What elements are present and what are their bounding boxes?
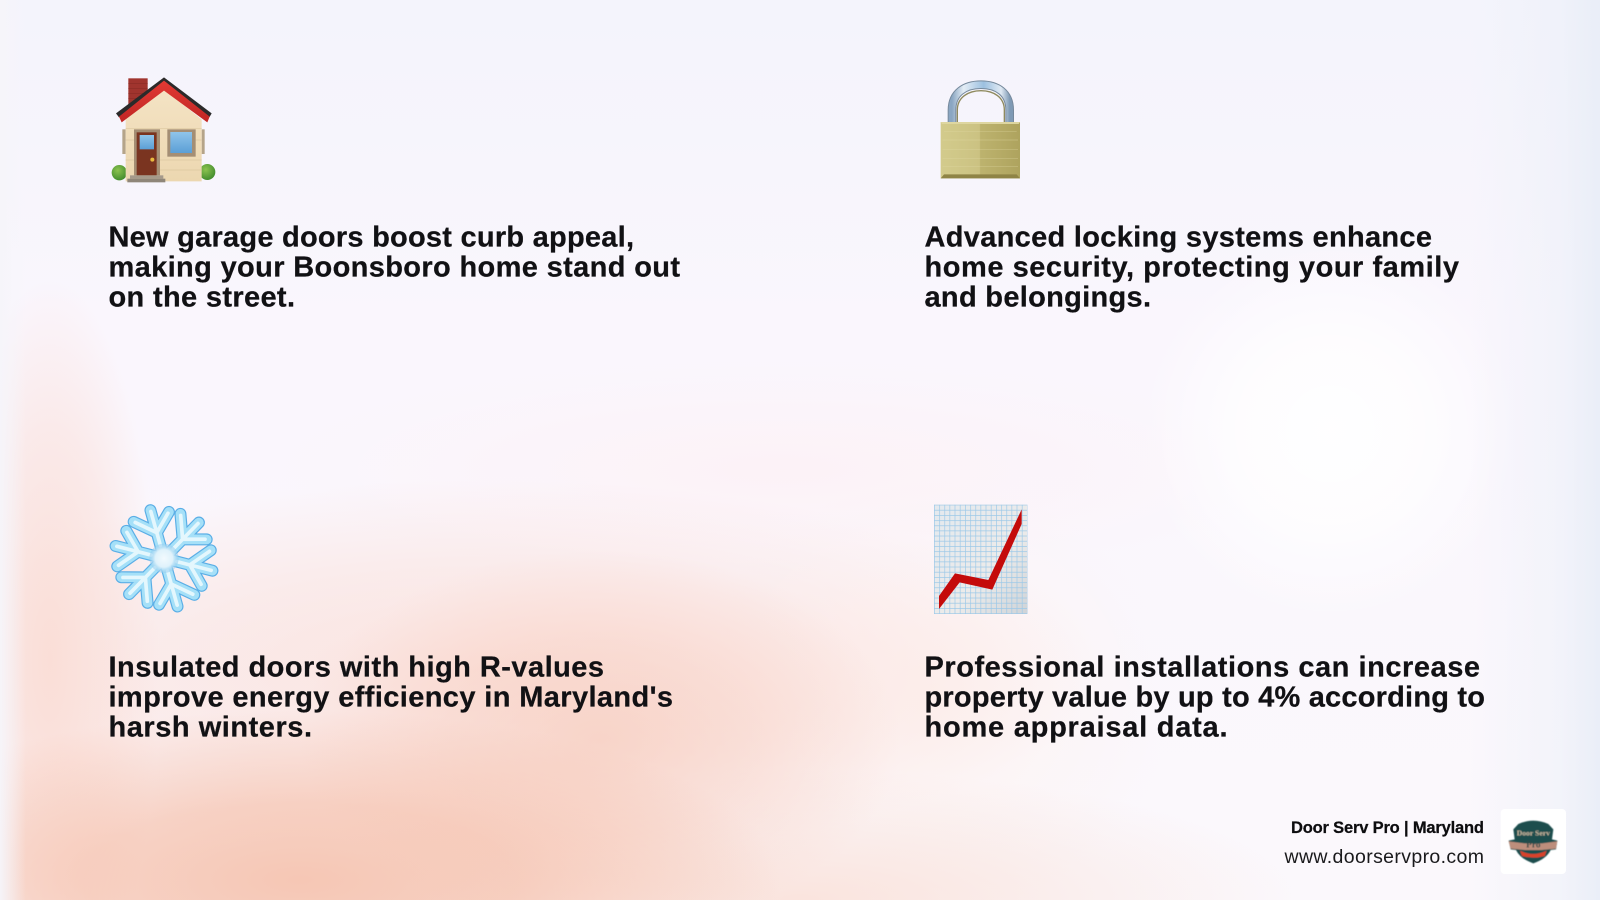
- text: energy efficiency: improve energy efficiency in Maryland's: [108, 682, 673, 714]
- logo tile: [1501, 809, 1566, 874]
- icon: padlock: [941, 85, 1020, 178]
- text: security: Advanced locking systems enhance: [924, 222, 1432, 254]
- panel: curb appeal: [108, 77, 688, 314]
- icon: rising chart: [934, 505, 1027, 614]
- text: curb appeal: on the street.: [108, 282, 295, 314]
- text: security: home security, protecting your family: [924, 252, 1459, 284]
- text: energy efficiency: harsh winters.: [108, 712, 312, 744]
- panel: security: [924, 85, 1468, 314]
- text: curb appeal: making your Boonsboro home stand out: [108, 252, 680, 284]
- text: property value: Professional installations can increase: [924, 652, 1480, 684]
- website url: www.doorservpro.com: [1284, 846, 1484, 868]
- text: property value: home appraisal data.: [924, 712, 1228, 744]
- icon: snowflake: [111, 506, 217, 611]
- logo tile: Pro: [1526, 840, 1541, 850]
- text: security: and belongings.: [924, 282, 1151, 314]
- logo tile: Door Serv: [1517, 828, 1550, 837]
- footer: brand block: [1284, 809, 1566, 874]
- brand name: Door Serv Pro | Maryland: [1291, 819, 1484, 837]
- text: energy efficiency: Insulated doors with high R-values: [108, 652, 604, 684]
- icon: house: [112, 77, 215, 182]
- panel: energy efficiency: [108, 506, 681, 744]
- text: curb appeal: New garage doors boost curb appeal,: [108, 222, 634, 254]
- panel: property value: [924, 505, 1493, 744]
- text: property value: property value by up to 4% according to: [924, 682, 1485, 714]
